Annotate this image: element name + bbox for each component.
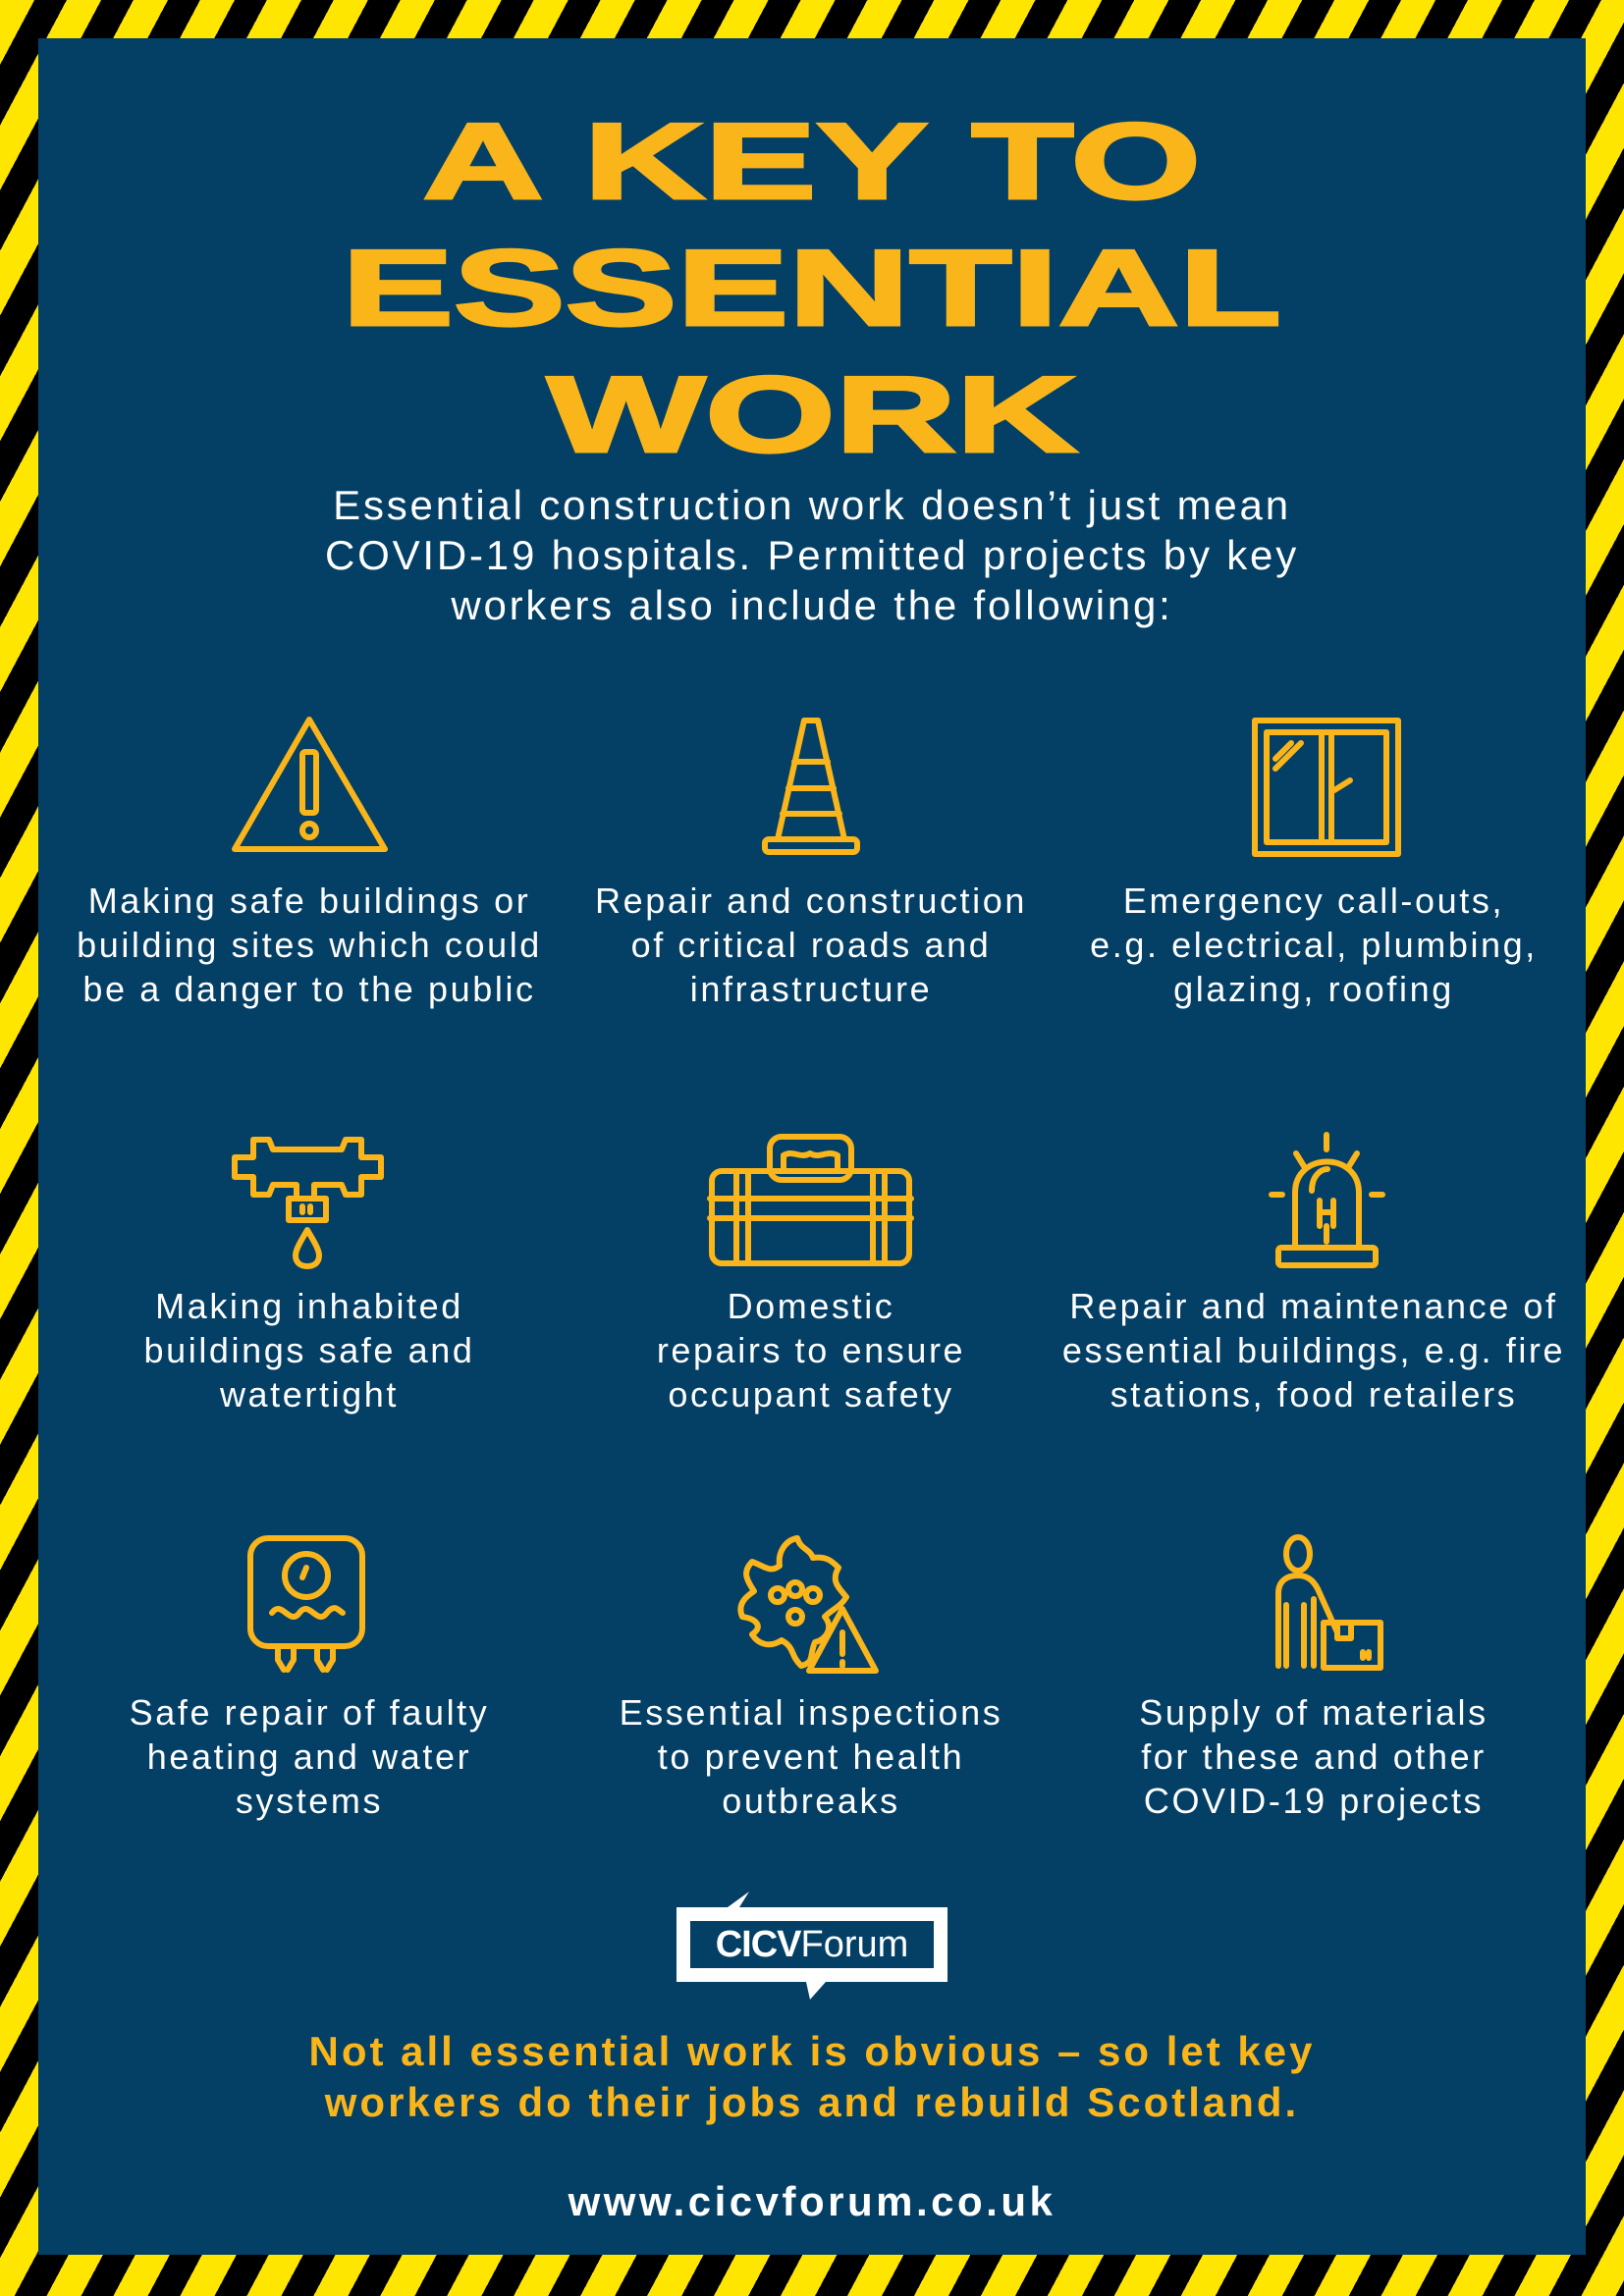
- icon: window: [1252, 718, 1401, 857]
- caption: inspections: Essential inspections: [620, 1692, 1002, 1733]
- icon: leaking pipe: [232, 1137, 384, 1269]
- logo: CICV Forum: CICVForum: [716, 1924, 908, 1965]
- caption: making safe: be a danger to the public: [82, 969, 536, 1009]
- caption: domestic: occupant safety: [668, 1374, 954, 1415]
- caption: heating: [130, 1692, 489, 1821]
- caption: heating: systems: [236, 1781, 383, 1821]
- caption: supply: [1139, 1692, 1489, 1821]
- caption: heating: Safe repair of faulty: [130, 1692, 489, 1733]
- icon: alarm light: [1269, 1132, 1385, 1268]
- title: A KEY TO: [423, 101, 1201, 222]
- caption: watertight: Making inhabited: [155, 1286, 463, 1326]
- title: ESSENTIAL: [343, 228, 1281, 348]
- caption: roads: of critical roads and: [631, 925, 991, 965]
- icon: person with box: [1275, 1534, 1383, 1671]
- caption: emergency: Emergency call-outs,: [1123, 881, 1504, 921]
- tagline: Not all essential work is obvious – so let key: [308, 2028, 1315, 2074]
- caption: watertight: watertight: [220, 1374, 399, 1415]
- caption: essential buildings: stations, food retailers: [1110, 1374, 1517, 1415]
- intro text: COVID-19 hospitals. Permitted projects by key: [325, 532, 1299, 578]
- title: WORK: [547, 354, 1077, 475]
- caption: essential buildings: essential buildings, e.g. fire: [1062, 1330, 1565, 1370]
- caption: supply: Supply of materials: [1139, 1692, 1489, 1733]
- caption: inspections: to prevent health: [658, 1736, 964, 1777]
- caption: supply: for these and other: [1141, 1736, 1487, 1777]
- caption: supply: COVID-19 projects: [1144, 1781, 1484, 1821]
- icon: traffic cone: [762, 718, 860, 855]
- icon: toolbox: [707, 1134, 914, 1266]
- caption: domestic: [657, 1286, 965, 1415]
- tagline: [308, 2028, 1315, 2125]
- icon: virus with warning: [737, 1535, 879, 1674]
- caption: inspections: outbreaks: [722, 1781, 900, 1821]
- caption: emergency: glazing, roofing: [1173, 969, 1454, 1009]
- caption: heating: heating and water: [147, 1736, 471, 1777]
- caption: watertight: buildings safe and: [143, 1330, 475, 1370]
- caption: domestic: repairs to ensure: [657, 1330, 965, 1370]
- caption: roads: [595, 881, 1027, 1009]
- icon: warning triangle: [232, 717, 388, 852]
- caption: essential buildings: Repair and maintenance of: [1069, 1286, 1558, 1326]
- intro text: Essential construction work doesn’t just mean: [333, 482, 1291, 528]
- logo: CICV Forum: [677, 1892, 947, 2000]
- website url: www.cicvforum.co.uk: [568, 2178, 1056, 2224]
- caption: watertight: [143, 1286, 475, 1415]
- intro text: workers also include the following:: [451, 582, 1173, 628]
- caption: domestic: Domestic: [728, 1286, 894, 1326]
- caption: making safe: building sites which could: [77, 925, 542, 965]
- title: [343, 101, 1281, 475]
- icon: water heater: [247, 1535, 365, 1673]
- caption: emergency: e.g. electrical, plumbing,: [1090, 925, 1538, 965]
- caption: roads: infrastructure: [690, 969, 932, 1009]
- caption: making safe: Making safe buildings or: [88, 881, 530, 921]
- caption: essential buildings: [1062, 1286, 1565, 1415]
- caption: inspections: [620, 1692, 1002, 1821]
- caption: roads: Repair and construction: [595, 881, 1027, 921]
- intro text: [325, 482, 1299, 628]
- tagline: workers do their jobs and rebuild Scotland.: [325, 2079, 1299, 2125]
- caption: making safe: [77, 881, 542, 1009]
- caption: emergency: [1090, 881, 1538, 1009]
